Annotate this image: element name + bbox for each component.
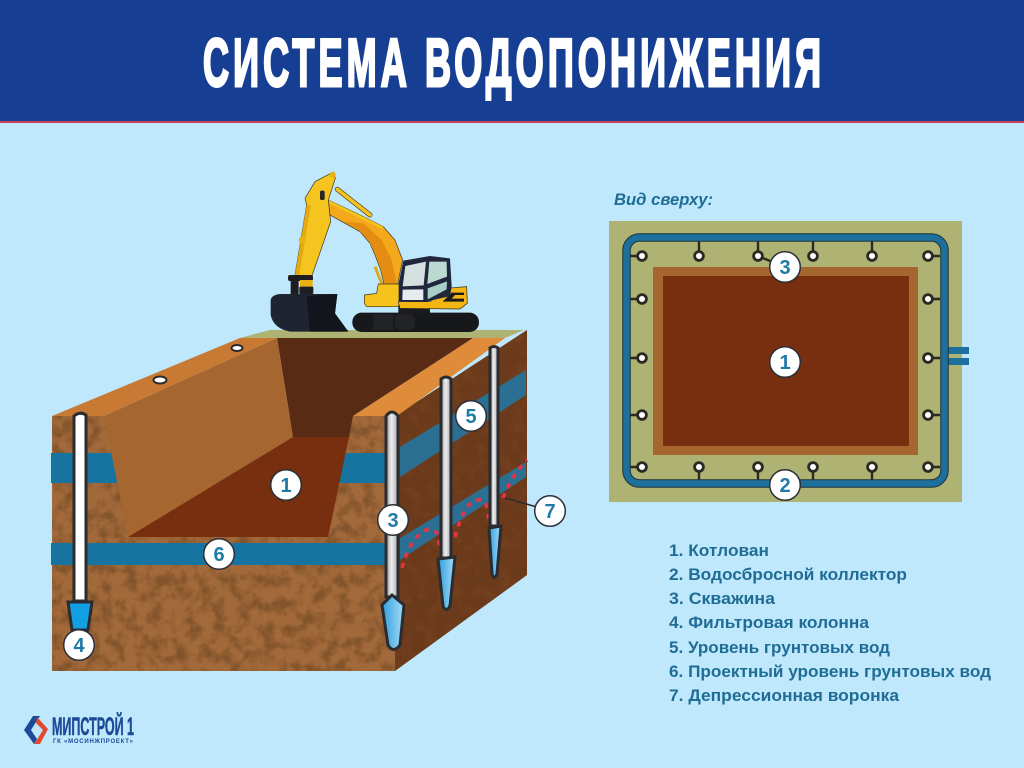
well column middle: [438, 377, 455, 610]
label 4: 4: [73, 635, 85, 657]
front soil face: [52, 416, 395, 671]
plan label 2: [770, 470, 800, 500]
outlet pipe: [948, 347, 969, 365]
counterweight: [398, 287, 467, 309]
depression cone dashes: [402, 460, 527, 568]
legend list: [669, 541, 991, 705]
plan label 3: 3: [779, 257, 791, 279]
arm: [295, 172, 335, 277]
well column front: [382, 412, 404, 650]
legend list: 6. Проектный уровень грунтовых вод: [669, 662, 991, 681]
legend list: 7. Депрессионная воронка: [669, 686, 900, 705]
wells: [638, 252, 932, 471]
ground area: [609, 221, 962, 502]
front groundwater band: [51, 453, 386, 483]
boom cylinder: [337, 189, 388, 300]
label 5: [456, 401, 486, 431]
section diagram: excavation block: [51, 330, 565, 671]
collector pipe: [626, 238, 944, 484]
plan label 2: 2: [779, 475, 791, 497]
logo mark: [24, 716, 48, 744]
pit back wall: [277, 338, 473, 437]
label 3: 3: [387, 510, 399, 532]
legend list: 2. Водосбросной коллектор: [669, 565, 907, 584]
bucket: [271, 294, 348, 332]
legend list: 5. Уровень грунтовых вод: [669, 638, 890, 657]
boom: [328, 200, 403, 288]
plan label 1: [770, 347, 800, 377]
logo: [24, 711, 134, 745]
well connectors: [630, 240, 940, 482]
tracks: [352, 313, 479, 332]
logo name: МИПСТРОЙ 1: [52, 711, 134, 741]
plan label 1: 1: [779, 352, 791, 374]
label 7: 7: [544, 501, 556, 523]
label 4: [64, 630, 94, 660]
right soil face: [395, 330, 527, 671]
logo subtitle: ГК «МОСИНЖПРОЕКТ»: [53, 739, 134, 745]
label 1: [271, 470, 301, 500]
leader line to label 7: [505, 498, 537, 507]
pit floor: [128, 437, 349, 537]
right groundwater band: [400, 370, 526, 477]
label 5: 5: [465, 406, 477, 428]
pipe holes on rim: [154, 345, 242, 384]
label 3: [378, 505, 408, 535]
top ground surface: [240, 330, 524, 338]
design groundwater band: [51, 543, 386, 565]
well column back: [489, 346, 501, 578]
left orange rim: [52, 338, 277, 416]
icon: excavator: [271, 172, 479, 332]
bucket linkage: [288, 275, 313, 294]
label 6: 6: [213, 544, 225, 566]
legend list: 1. Котлован: [669, 541, 769, 560]
right design groundwater band: [400, 462, 526, 560]
filter column 4: [68, 413, 92, 630]
heading: top view: Вид сверху:: [614, 190, 713, 209]
right orange rim: [353, 338, 505, 416]
label 1: 1: [280, 475, 292, 497]
body: [364, 284, 400, 307]
legend list: 3. Скважина: [669, 589, 776, 608]
label 6: [204, 539, 234, 569]
pit slope: [653, 267, 918, 455]
pit bottom: [663, 276, 909, 446]
plan label 3: [770, 252, 800, 282]
panel: top view plan: [609, 221, 969, 502]
header banner: [0, 0, 1024, 123]
label 7: [535, 496, 565, 526]
title: СИСТЕМА ВОДОПОНИЖЕНИЯ: [203, 25, 821, 101]
cabin: [399, 256, 452, 302]
legend list: 4. Фильтровая колонна: [669, 613, 870, 632]
pit left wall: [104, 338, 293, 537]
